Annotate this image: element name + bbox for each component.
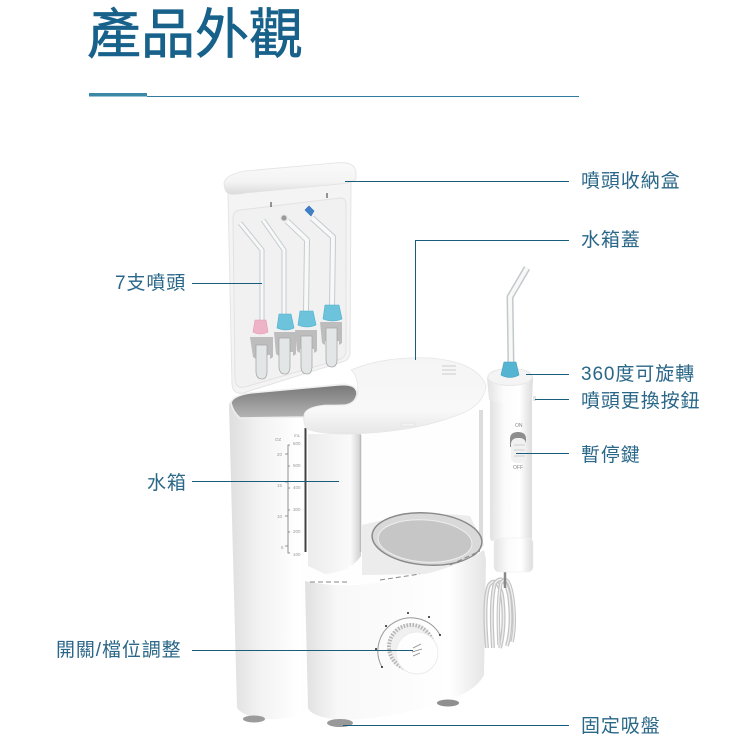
swivel ring <box>501 362 519 378</box>
title: 產品外觀 <box>87 5 303 65</box>
fitted nozzle <box>510 268 527 365</box>
measuring scale: mL <box>294 433 301 438</box>
measuring scale: 400 <box>293 485 301 490</box>
callout: tank lid <box>416 229 641 360</box>
measuring scale: 200 <box>293 529 301 534</box>
storage box body <box>228 180 351 393</box>
measuring scale: 600 <box>293 441 301 446</box>
storage box recess <box>233 198 346 387</box>
measuring scale: 20 <box>277 452 283 457</box>
hose coil <box>485 572 514 648</box>
tank floor and filter disc <box>362 509 484 575</box>
handle body <box>490 395 532 541</box>
base foot left <box>327 719 353 727</box>
callout: pause button <box>516 444 641 466</box>
callout: nozzle release button: 噴頭更換按鈕 <box>581 390 700 412</box>
callout: tank lid: 水箱蓋 <box>581 229 641 251</box>
base unit <box>305 550 486 727</box>
nozzle 2 blue <box>263 220 296 374</box>
nozzle 3 blue <box>281 215 317 374</box>
storage box lid <box>224 163 356 194</box>
transparent water tank <box>306 410 484 585</box>
callout: 7 nozzles: 7支噴頭 <box>115 272 186 294</box>
nozzle tips <box>240 206 342 379</box>
replace nozzle button <box>533 396 536 401</box>
measuring scale: 5 <box>281 545 284 550</box>
callout: suction feet: 固定吸盤 <box>581 715 661 737</box>
measuring scale: 100 <box>293 552 301 557</box>
handle top cap <box>487 368 533 403</box>
callout: water tank: 水箱 <box>147 472 187 494</box>
measuring scale: OZ <box>275 437 282 442</box>
nozzle 4 blue <box>305 206 342 367</box>
pause switch <box>510 423 526 471</box>
callout: 360 rotation: 360度可旋轉 <box>581 363 695 385</box>
inner tube <box>308 434 361 574</box>
control dial <box>375 612 441 674</box>
title divider <box>89 93 579 97</box>
measuring scale <box>275 433 301 557</box>
measuring scale: 300 <box>293 507 301 512</box>
callout: pause button: 暫停鍵 <box>581 444 641 466</box>
callout: nozzle storage box: 噴頭收納盒 <box>581 170 681 192</box>
tank column opening <box>231 385 357 418</box>
water tank column <box>229 383 357 722</box>
pause switch: ON <box>515 423 523 429</box>
measuring scale: 500 <box>293 463 301 468</box>
handle with nozzle <box>487 268 536 572</box>
handle collar <box>494 538 533 572</box>
tank column body <box>229 383 357 719</box>
column foot <box>243 716 265 722</box>
tank right wall <box>479 410 483 545</box>
measuring scale: 15 <box>277 483 283 488</box>
nozzle storage box <box>224 163 356 393</box>
nozzle 1 pink <box>240 223 273 379</box>
tank lid <box>304 358 486 434</box>
measuring scale: 10 <box>277 514 283 519</box>
callout: power and level dial: 開關/檔位調整 <box>56 639 182 661</box>
base foot right <box>437 700 459 706</box>
pause switch: OFF <box>513 465 523 471</box>
